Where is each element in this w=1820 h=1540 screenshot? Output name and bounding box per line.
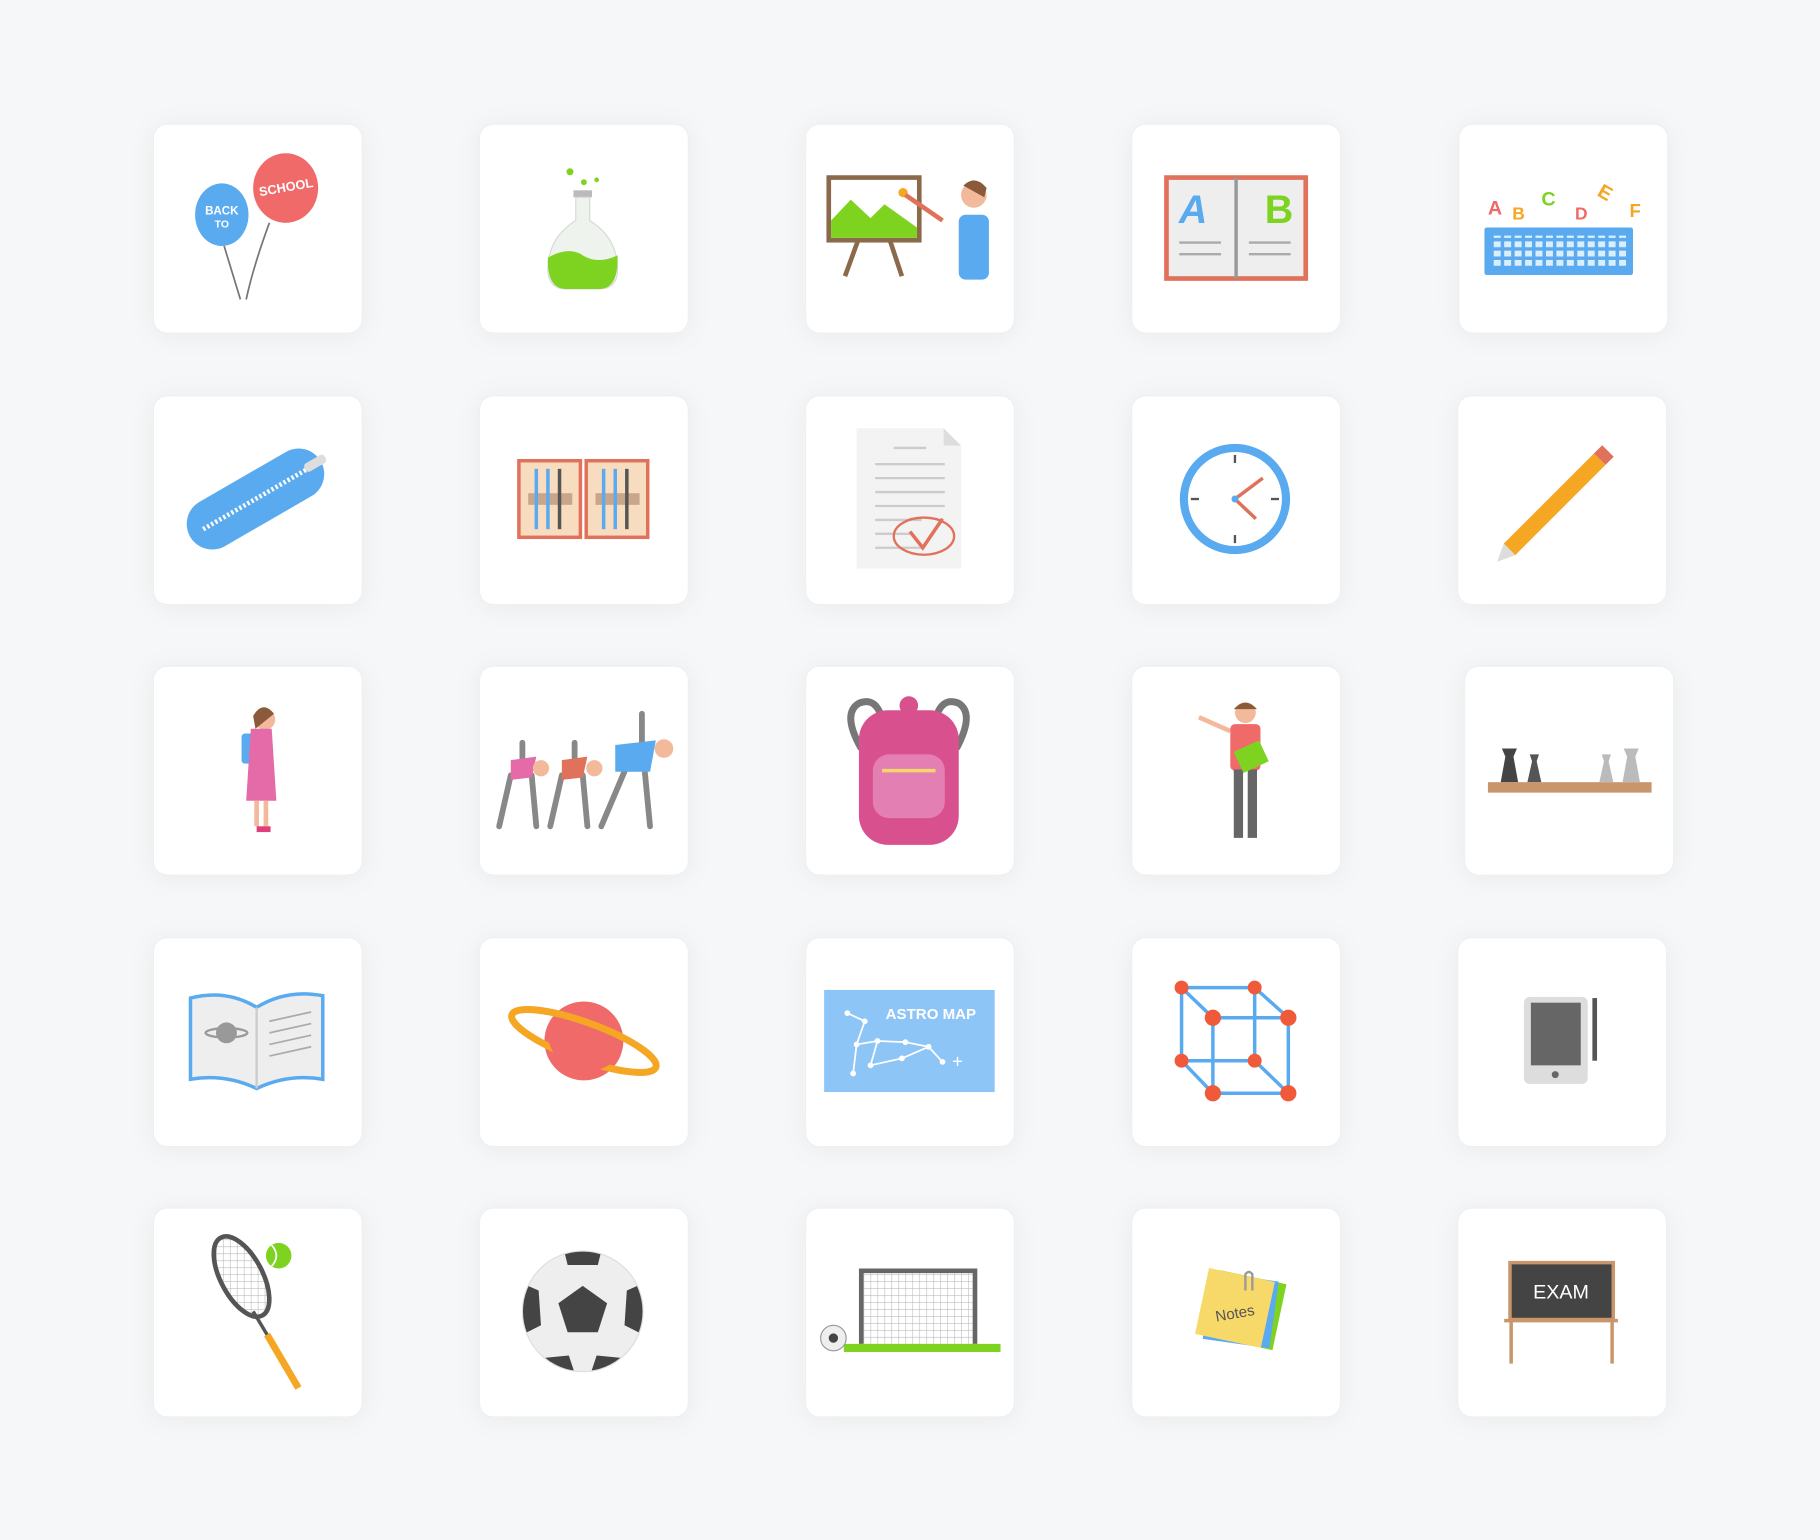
icon: keyboard letters: C — [1541, 188, 1556, 210]
icon: keyboard letters: B — [1512, 203, 1525, 223]
icon: astro map: ASTRO MAP — [886, 1006, 976, 1023]
icon: tablet — [1524, 997, 1597, 1084]
icon: backpack — [851, 696, 966, 845]
icon: AB book — [1166, 178, 1306, 279]
icon: exam blackboard — [1504, 1263, 1618, 1364]
icon: cube — [1175, 981, 1296, 1101]
icon: pencil — [1491, 445, 1614, 567]
card grid — [153, 124, 1674, 1417]
icon: keyboard letters: A — [1488, 198, 1502, 220]
icon: AB book: A — [1178, 188, 1207, 232]
icon: pencil case — [177, 436, 339, 559]
icon: balloons: TO — [215, 219, 229, 230]
icon: balloons — [195, 153, 318, 299]
icon: clock — [1184, 448, 1286, 550]
icon: exam blackboard: EXAM — [1533, 1282, 1589, 1304]
icon: keyboard letters: F — [1630, 200, 1641, 221]
icon: planet — [506, 997, 662, 1085]
icon: AB book: B — [1265, 188, 1293, 232]
icon: open book — [190, 994, 323, 1089]
icon: keyboard letters: D — [1575, 203, 1588, 223]
icon: painter with easel — [829, 178, 989, 280]
icon: chess pieces — [1488, 749, 1652, 793]
icon: astro map — [824, 990, 995, 1092]
icon: astro map: + — [952, 1051, 963, 1072]
icon: balloons: SCHOOL — [258, 175, 314, 199]
icon: soccer ball — [522, 1250, 644, 1372]
icon: flask — [548, 168, 618, 289]
icon: keyboard letters: E — [1594, 180, 1616, 206]
icon: abacus — [519, 461, 648, 537]
icon: schoolgirl — [242, 707, 276, 832]
icon: sticky notes: Notes — [1214, 1302, 1256, 1326]
icon: checked document — [857, 428, 961, 569]
icon: exercising kids — [499, 714, 673, 826]
icon: football goal — [821, 1271, 1001, 1352]
icon: balloons: BACK — [205, 205, 239, 218]
icon: student with book — [1199, 702, 1269, 838]
icon: keyboard letters — [1484, 180, 1641, 275]
icon: sticky notes — [1195, 1268, 1286, 1350]
icon: tennis racket — [212, 1234, 302, 1390]
